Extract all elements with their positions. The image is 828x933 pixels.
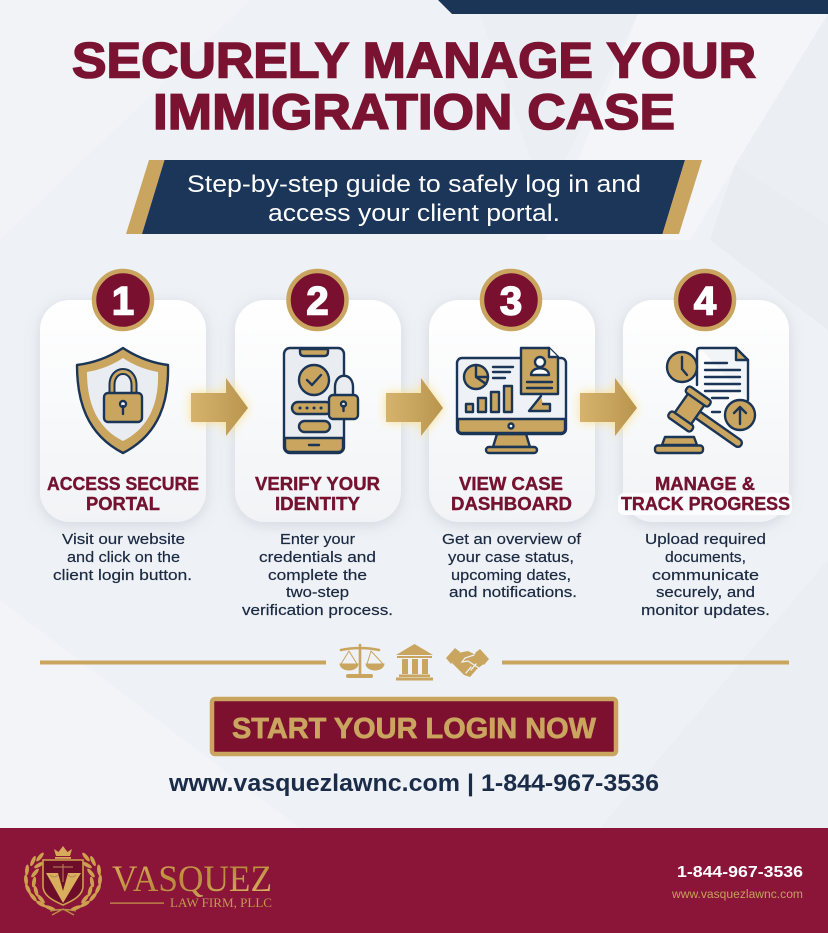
logo: wordmark: VASQUEZ: [112, 859, 272, 900]
call to action button: START YOUR LOGIN NOW: [232, 713, 597, 745]
icon: dashboard monitor: [457, 348, 566, 453]
step 3 heading: VIEW CASE: [459, 474, 563, 494]
step 4 description: Upload required: [645, 531, 766, 548]
step 4 description: documents,: [665, 549, 746, 566]
step 1 description: client login button.: [53, 567, 192, 584]
footer band: [0, 828, 828, 933]
top navy accent bar: [438, 0, 828, 14]
footer contact: 1-844-967-3536: [677, 864, 803, 881]
badge: number 1: [94, 271, 152, 329]
badge: number 3: 3: [500, 280, 522, 324]
step 2 heading: IDENTITY: [275, 494, 360, 514]
step 4 description: securely, and: [656, 584, 755, 601]
step 4 description: communicate: [652, 567, 759, 584]
icon: shield with padlock: [77, 348, 168, 453]
panel: step 4 card: [618, 300, 792, 522]
arrow: step 1 to 2: [191, 378, 248, 436]
icon: courthouse: [396, 644, 433, 680]
call to action button: [212, 699, 616, 754]
step 1 description: [53, 531, 192, 584]
step 2 description: [242, 531, 393, 619]
step 2 description: two-step: [286, 584, 349, 601]
step 1 description: and click on the: [67, 549, 180, 566]
icon: scales of justice: [340, 645, 384, 676]
badge: number 1: 1: [112, 280, 134, 324]
step 1 heading: ACCESS SECURE: [47, 474, 199, 494]
footer contact: www.vasquezlawnc.com: [671, 889, 803, 901]
arrow: step 2 to 3: [386, 378, 443, 436]
step 4 heading: TRACK PROGRESS: [621, 494, 790, 514]
step 2 description: verification process.: [242, 602, 393, 619]
step 2 heading: VERIFY YOUR: [255, 474, 380, 494]
panel: step 3 card: [429, 300, 595, 522]
panel: step 2 card: [235, 300, 401, 522]
badge: number 4: 4: [694, 280, 717, 324]
subtitle banner: Step-by-step guide to safely log in and: [187, 171, 641, 198]
badge: number 3: [482, 271, 540, 329]
step 3 description: and notifications.: [449, 584, 577, 601]
title: IMMIGRATION CASE: [153, 84, 675, 140]
step 1 heading: [47, 474, 199, 514]
step 2 description: credentials and: [259, 549, 376, 566]
step 3 heading: DASHBOARD: [451, 494, 572, 514]
divider with icons: [40, 644, 789, 680]
step 4 description: [641, 531, 770, 619]
contact line: www.vasquezlawnc.com | 1-844-967-3536: [168, 770, 659, 797]
arrow: step 3 to 4: [580, 378, 637, 436]
logo: wordmark: LAW FIRM, PLLC: [170, 895, 272, 910]
subtitle banner: access your client portal.: [268, 200, 560, 227]
step 1 heading: PORTAL: [86, 494, 160, 514]
logo: crest: [24, 846, 102, 915]
badge: number 2: [288, 271, 346, 329]
title: SECURELY MANAGE YOUR: [72, 32, 756, 88]
icon: document, clock and gavel: [655, 348, 755, 461]
step 3 description: upcoming dates,: [451, 567, 571, 584]
icon: handshake: [446, 648, 489, 677]
step 3 description: your case status,: [448, 549, 574, 566]
step 3 description: [442, 531, 582, 601]
step 4 heading: MANAGE &: [655, 474, 755, 494]
step 1 description: Visit our website: [62, 531, 185, 548]
step 2 description: complete the: [268, 567, 367, 584]
step 4 heading: [618, 474, 792, 515]
badge: number 2: 2: [306, 280, 329, 324]
footer contact: [671, 864, 803, 901]
subtitle banner: [126, 160, 702, 234]
badge: number 4: [676, 271, 734, 329]
step 4 description: monitor updates.: [641, 602, 770, 619]
step 3 heading: [451, 474, 572, 514]
panel: step 1 card: [40, 300, 206, 522]
step 2 heading: [255, 474, 380, 514]
step 2 description: Enter your: [280, 531, 355, 548]
step 3 description: Get an overview of: [442, 531, 582, 548]
title: [72, 32, 756, 140]
icon: phone with lock: [284, 348, 358, 453]
